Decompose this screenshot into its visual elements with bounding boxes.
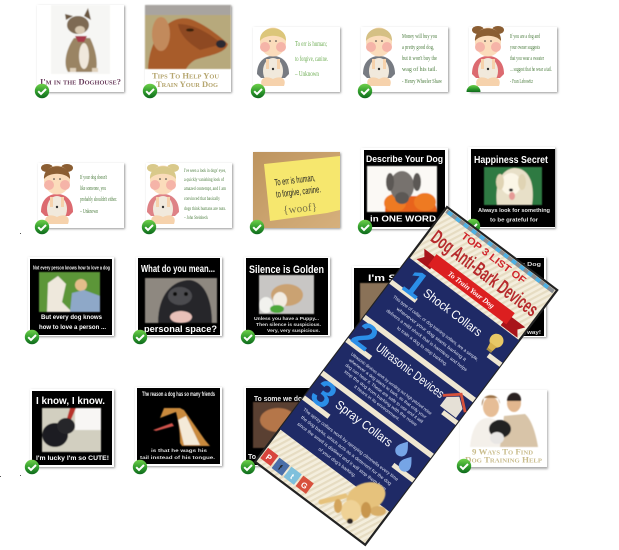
social icons: t bbox=[288, 472, 296, 481]
check badge bbox=[241, 330, 255, 344]
section 2: ultrasonic devices: it hears in its environment. bbox=[353, 384, 401, 422]
photo: black dog on floor bbox=[42, 408, 101, 452]
caption: Dog Training Help bbox=[465, 456, 542, 464]
quote text: Money will buy you bbox=[402, 33, 437, 40]
heading: I know, I know. bbox=[36, 395, 105, 407]
sticky note: to forgive, canine. bbox=[275, 184, 321, 201]
tagline bbox=[478, 208, 551, 224]
navy panel bbox=[280, 257, 519, 512]
tagline bbox=[140, 448, 215, 461]
check badge bbox=[241, 460, 255, 474]
photo: dog profile bbox=[153, 408, 210, 446]
illustration: yellow lab lying down bbox=[321, 477, 390, 524]
ribbon: To Train Your Dog bbox=[446, 269, 496, 310]
section 2: ultrasonic devices: stop the dog from barking with the noise bbox=[343, 369, 419, 428]
section 1: shock collars: delivers a mild shock that is harmless and helps bbox=[385, 308, 469, 373]
quote text: to forgive, canine. bbox=[295, 55, 328, 63]
quote text bbox=[402, 33, 442, 85]
caption: Train Your Dog bbox=[156, 80, 218, 89]
infographic: top 3 dog anti-bark devices bbox=[255, 207, 557, 545]
card: Steinbeck quote bbox=[142, 163, 233, 234]
card: I'm S... (mostly hidden) bbox=[351, 266, 443, 344]
card: what do you mean bbox=[133, 257, 223, 344]
card: money will buy you a pretty good dog quote bbox=[358, 27, 449, 98]
top dotted edge bbox=[445, 209, 555, 293]
quote text: If your dog doesn't bbox=[80, 174, 107, 181]
card: the reason a dog has so many friends bbox=[133, 387, 223, 474]
caption: Tips To Help You bbox=[152, 72, 220, 80]
tagline bbox=[254, 316, 321, 333]
main title: Dog Anti-Bark Devices bbox=[427, 227, 542, 321]
check badge bbox=[25, 330, 39, 344]
card: 9 ways to find dog training help bbox=[457, 390, 548, 473]
tagline: to be grateful for bbox=[490, 218, 539, 224]
quote text: – Unknown bbox=[294, 70, 319, 78]
illustration: girl with dog bbox=[472, 26, 504, 86]
photo: grey dog with orange toy bbox=[367, 166, 437, 212]
section 1: shock collars: to train a dog to stop barking. bbox=[396, 325, 449, 367]
stray specks bbox=[0, 233, 21, 477]
heading: The reason a dog has so many friends bbox=[142, 392, 215, 398]
card: happiness secret bbox=[466, 147, 556, 233]
tagline fragment: Anyway! bbox=[515, 330, 541, 336]
section 3: spray collars: The spray collars work by spraying citronella every time bbox=[302, 407, 400, 482]
check badge bbox=[35, 220, 49, 234]
check badge bbox=[351, 330, 365, 344]
section 2: ultrasonic devices: whenever a dog starts to bark, so that only your bbox=[348, 358, 428, 420]
tagline: Then silence is suspicious. bbox=[256, 322, 321, 327]
caption: 9 Ways To Find bbox=[472, 448, 534, 456]
card: I know I know bbox=[25, 389, 115, 474]
illustration: boy with dog bbox=[257, 28, 289, 86]
icon: light bulb bbox=[483, 331, 506, 355]
card: sticky note on cork bbox=[250, 152, 341, 234]
tagline: how to love a person ... bbox=[39, 325, 106, 331]
check badge bbox=[358, 84, 372, 98]
tagline: Always look for something bbox=[478, 208, 551, 214]
quote text bbox=[294, 40, 328, 78]
card: tips to help you train your dog bbox=[143, 5, 232, 98]
social icons: P bbox=[264, 452, 274, 463]
check badge bbox=[143, 84, 157, 98]
card: to some we don't bbox=[241, 387, 332, 474]
photo: brown dog bbox=[145, 5, 231, 69]
caption bbox=[465, 448, 542, 464]
quote text: I've seen a look in dogs' eyes, bbox=[184, 169, 226, 174]
quote text: convinced that basically bbox=[184, 197, 220, 202]
tagline: personal space? bbox=[144, 324, 217, 334]
photo: girl and white dog bbox=[39, 272, 100, 312]
section 1: shock collars: Shock Collars bbox=[420, 286, 485, 339]
illustration: girl with dog bbox=[41, 164, 73, 224]
quote text: a quickly vanishing look of bbox=[184, 178, 224, 183]
card: partly hidden right bbox=[460, 257, 547, 338]
card: describe your dog bbox=[358, 148, 449, 234]
heading: To some we don't bbox=[254, 396, 311, 403]
icon: house bbox=[437, 386, 472, 420]
section 3: spray collars bbox=[286, 372, 427, 502]
sticky note: To err is human, bbox=[274, 173, 316, 189]
quote text: ... suggest that he wear a tail. bbox=[510, 66, 552, 73]
photo bbox=[253, 402, 310, 448]
quote text bbox=[510, 33, 552, 85]
heading: Silence is Golden bbox=[249, 264, 324, 276]
tagline: is that he wags his bbox=[151, 448, 207, 454]
quote text: If you are a dog and bbox=[510, 33, 540, 40]
card: I'm in the doghouse bbox=[35, 5, 125, 98]
ribbon bbox=[415, 246, 528, 338]
photo: corgi puppy bbox=[259, 275, 314, 314]
quote text: probably shouldn't either. bbox=[80, 196, 117, 203]
heading: Describe Your Dog bbox=[366, 154, 443, 164]
photo bbox=[360, 283, 420, 323]
section 1: shock collars bbox=[378, 262, 512, 386]
check badge bbox=[457, 459, 471, 473]
section 3: spray collars: the dog barks, which acts as a deterrent for the dog bbox=[300, 415, 393, 486]
caption: I'm in the Doghouse? bbox=[40, 78, 121, 86]
section 2: ultrasonic devices: 2 bbox=[344, 314, 386, 359]
illustration: blonde girl with dog bbox=[147, 164, 179, 224]
quote text: - Fran Lebowitz bbox=[510, 78, 533, 85]
illustration: boy with dog bbox=[363, 28, 395, 86]
quote text: wag of his tail. bbox=[402, 66, 437, 73]
tagline: I'm lucky I'm so CUTE! bbox=[36, 455, 109, 462]
tagline bbox=[39, 315, 106, 331]
section 3: spray collars: Spray Collars bbox=[333, 398, 395, 450]
heading: Happiness Secret bbox=[474, 155, 549, 166]
sticky note: {woof} bbox=[283, 201, 318, 217]
card: if your dog doesn't like someone quote bbox=[35, 163, 125, 234]
check badge bbox=[250, 220, 264, 234]
heading: I'm Sorry bbox=[368, 273, 421, 284]
social icons: f bbox=[276, 463, 284, 472]
quote text: To err is human; bbox=[295, 40, 327, 48]
tagline: tail instead of his tongue. bbox=[140, 455, 215, 461]
social icons bbox=[260, 448, 314, 494]
section 1: shock collars: whenever your dog starts barking it bbox=[395, 306, 468, 363]
heading: What do you mean... bbox=[141, 264, 215, 275]
section 2: ultrasonic devices: Ultrasonic devices work by sending out high pitched noise bbox=[350, 352, 433, 416]
icon: water drops bbox=[387, 438, 422, 474]
section 2: ultrasonic devices bbox=[328, 314, 478, 451]
photo: white dog on grass bbox=[484, 167, 542, 205]
tagline: Very, very suspicious. bbox=[267, 328, 320, 333]
check badge bbox=[133, 460, 147, 474]
quote text: like someone, you bbox=[80, 185, 106, 192]
quote text: – John Steinbeck bbox=[183, 216, 208, 221]
quote text bbox=[79, 174, 117, 215]
quote text: that you wear a sweater bbox=[510, 55, 544, 62]
tagline: To bbox=[248, 454, 256, 461]
check badge bbox=[25, 460, 39, 474]
title line: TOP 3 LIST OF bbox=[459, 231, 528, 287]
check badge bbox=[251, 84, 265, 98]
section 3: spray collars: 3 bbox=[303, 372, 344, 417]
social icons: G bbox=[299, 480, 309, 491]
tagline: Unless you have a Puppy... bbox=[254, 316, 319, 321]
section 1: shock collars: 1 bbox=[395, 262, 436, 307]
quote text: amazed contempt, and I am bbox=[184, 187, 226, 192]
check badge bbox=[35, 84, 49, 98]
photo: black dog nose bbox=[145, 278, 217, 323]
check badge bbox=[466, 219, 480, 233]
quote text: a pretty good dog, bbox=[402, 44, 434, 51]
check badge bbox=[466, 85, 480, 92]
tagline: in ONE WORD bbox=[370, 214, 436, 224]
quote text: dogs think humans are nuts. bbox=[184, 207, 226, 212]
quote text: but it won't buy the bbox=[402, 55, 437, 62]
check badge bbox=[358, 220, 372, 234]
section 3: spray collars: since the smell is disliked and it will stop them from bbox=[296, 421, 387, 492]
heading: Not every person knows how to love a dog bbox=[33, 266, 110, 272]
quote text bbox=[183, 169, 226, 221]
section 1: shock collars: This type of collar, or dog training collars, are a simple, bbox=[392, 294, 480, 362]
quote text: - Henry Wheeler Shaw bbox=[402, 78, 442, 85]
card: to err is human quote bbox=[251, 27, 341, 98]
check badge bbox=[142, 220, 156, 234]
section 2: ultrasonic devices: Ultrasonic Devices bbox=[373, 340, 447, 401]
card: not every person knows bbox=[25, 257, 115, 344]
photo: puppy bbox=[51, 5, 110, 74]
section 3: spray collars: of your dog's barking. bbox=[317, 447, 357, 478]
card: if you are a dog quote bbox=[466, 26, 558, 93]
heading fragment: love a Dog bbox=[505, 262, 541, 268]
stripes between sections bbox=[302, 280, 502, 483]
photo: couple with dog bbox=[470, 393, 538, 447]
section 2: ultrasonic devices: dog can hear it. These are safe to use and it will bbox=[344, 362, 424, 424]
check badge bbox=[133, 330, 147, 344]
card: silence is golden bbox=[241, 257, 331, 344]
quote text: your owner suggests bbox=[510, 44, 540, 51]
sticky note bbox=[264, 156, 340, 221]
quote text: – Unknown bbox=[79, 208, 98, 215]
caption bbox=[152, 72, 220, 89]
tagline: But every dog knows bbox=[41, 315, 103, 321]
